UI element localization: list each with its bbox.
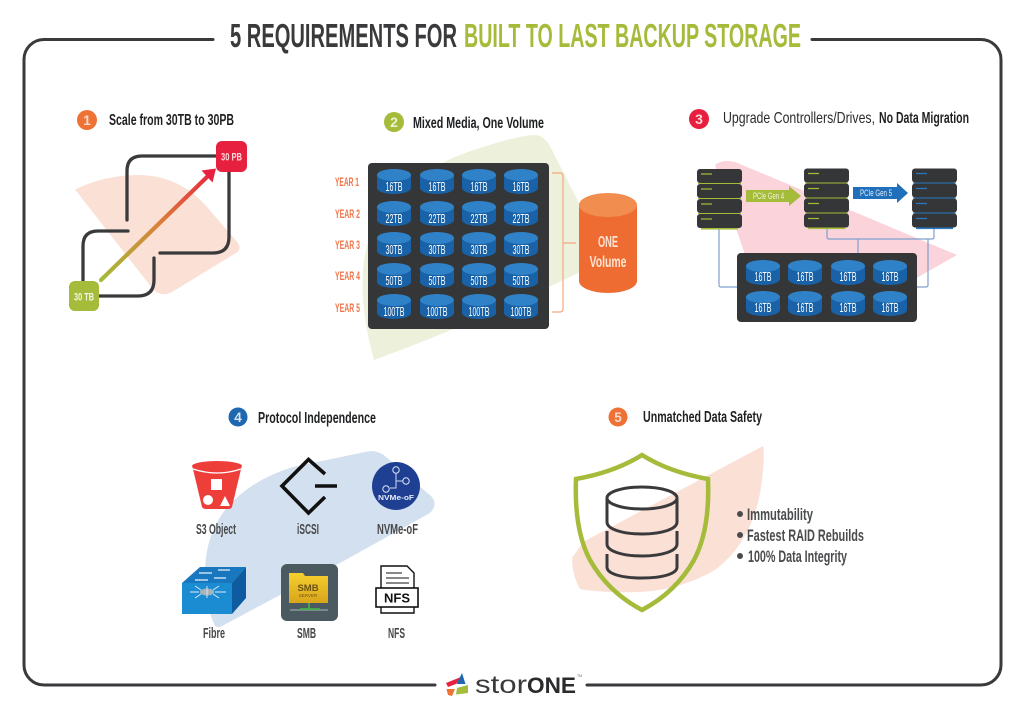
label: SMB: SMB — [297, 626, 316, 642]
box: 30 TB — [69, 281, 99, 311]
drive grid: 16TB — [470, 180, 488, 194]
icon: SMB server: SERVER — [299, 593, 318, 598]
icon: NFS file — [376, 566, 418, 613]
background shape: peach fan — [75, 175, 240, 294]
heading: upgrade: Upgrade Controllers/Drives, — [723, 110, 875, 127]
drive grid: 16TB — [512, 180, 530, 194]
label: S3 Object: S3 Object — [196, 522, 236, 538]
label: NVMe-oF: NVMe-oF — [377, 522, 418, 538]
drive shelf: 16TB — [840, 301, 856, 315]
icon: NVMe-oF: NVMe-oF — [378, 495, 415, 502]
heading: scale — [77, 110, 234, 130]
drive grid: 100TB — [384, 305, 404, 319]
box: 30 PB — [216, 141, 247, 172]
bullet list — [737, 506, 864, 566]
heading: mixed media: 2 — [390, 114, 398, 130]
heading: protocol — [228, 408, 376, 427]
arrow: PCIe Gen 4 — [746, 186, 801, 206]
icon: Fibre switch — [182, 567, 246, 614]
server: left — [697, 169, 742, 230]
drive grid: 16TB — [428, 180, 446, 194]
drive grid: 16TB — [386, 180, 402, 194]
drive grid — [368, 163, 549, 329]
heading: data safety: Unmatched Data Safety — [643, 409, 762, 426]
icon: shield — [576, 455, 708, 610]
background shape: green blob — [362, 135, 585, 360]
label: Fibre: Fibre — [203, 626, 225, 642]
logo: StorONE: ONE — [527, 673, 576, 698]
panel: data safety — [572, 408, 864, 610]
server: right — [912, 168, 957, 229]
label: NFS: NFS — [388, 626, 405, 642]
logo: StorONE: TM — [577, 674, 582, 678]
drive grid: 30TB — [386, 243, 402, 257]
server: middle — [804, 168, 849, 229]
drive grid: 22TB — [428, 212, 446, 226]
heading: protocol: 4 — [234, 410, 242, 425]
heading: scale: 1 — [83, 112, 91, 128]
box: 30 TB: 30 TB — [74, 292, 94, 304]
heading: protocol: Protocol Independence — [258, 410, 376, 427]
icon: S3 bucket — [192, 461, 242, 509]
background shape: blue blob — [205, 451, 435, 627]
drive grid: 22TB — [386, 212, 402, 226]
drive grid: 100TB — [510, 305, 532, 319]
heading: mixed media: Mixed Media, One Volume — [413, 115, 544, 132]
panel: scale — [69, 110, 247, 311]
drive shelf: 16TB — [882, 301, 898, 315]
title: 5 REQUIREMENTS FOR — [230, 17, 457, 54]
icon: database — [607, 487, 677, 578]
drive grid: 100TB — [468, 305, 490, 319]
arrow: PCIe Gen 5: PCIe Gen 5 — [860, 188, 892, 199]
connectors — [719, 228, 934, 287]
heading: mixed media — [384, 112, 544, 132]
drive shelf: 16TB — [754, 270, 772, 284]
panel: protocol independence — [182, 408, 435, 642]
logo: StorONE — [446, 671, 582, 699]
drive grid: 100TB — [426, 305, 448, 319]
one volume cylinder: Volume — [590, 254, 627, 271]
one volume cylinder: ONE — [598, 234, 618, 251]
heading: upgrade — [689, 109, 969, 129]
arrow: PCIe Gen 4: PCIe Gen 4 — [753, 191, 784, 202]
year labels — [335, 177, 360, 315]
drive shelf: 16TB — [754, 301, 772, 315]
drive grid: 50TB — [512, 274, 530, 288]
year labels: YEAR 4 — [335, 271, 360, 283]
year labels: YEAR 3 — [335, 240, 360, 252]
drive grid: 50TB — [470, 274, 488, 288]
drive shelf: 16TB — [882, 270, 898, 284]
panel: upgrade controllers — [689, 109, 969, 322]
drive grid: 30TB — [470, 243, 488, 257]
drive shelf: 16TB — [796, 301, 814, 315]
drive shelf: 16TB — [840, 270, 856, 284]
background shape: pink triangle — [715, 161, 957, 310]
bullet list: 100% Data Integrity — [748, 548, 848, 566]
heading: data safety: 5 — [614, 410, 622, 425]
bullet list: Immutability — [747, 506, 814, 524]
drive grid: 30TB — [512, 243, 530, 257]
arrow: PCIe Gen 5 — [853, 183, 908, 203]
title — [230, 17, 801, 54]
heading: data safety — [608, 408, 762, 426]
box: 30 PB: 30 PB — [221, 152, 242, 164]
drive grid: 30TB — [428, 243, 446, 257]
drive shelf — [737, 253, 917, 322]
one volume cylinder — [579, 193, 637, 293]
drive grid: 50TB — [386, 274, 402, 288]
drive grid: 22TB — [470, 212, 488, 226]
icon: NFS file: NFS — [384, 590, 410, 606]
icon: NVMe-oF — [372, 462, 420, 510]
icon: SMB server: SMB — [297, 583, 319, 594]
background shape: peach blob — [572, 446, 764, 592]
title: BUILT TO LAST BACKUP STORAGE — [464, 17, 801, 54]
icon: SMB server — [281, 564, 338, 621]
panel: mixed media — [335, 112, 637, 360]
logo: StorONE: stor — [475, 671, 527, 699]
year labels: YEAR 5 — [335, 303, 360, 315]
icon: iSCSI — [282, 460, 337, 513]
heading: upgrade: 3 — [695, 111, 703, 127]
label: iSCSI: iSCSI — [297, 522, 319, 538]
drive grid: 50TB — [428, 274, 446, 288]
connector lines — [83, 156, 229, 296]
drive shelf: 16TB — [796, 270, 814, 284]
year labels: YEAR 2 — [335, 209, 360, 221]
heading: upgrade: No Data Migration — [879, 110, 969, 127]
bullet list: Fastest RAID Rebuilds — [747, 527, 864, 545]
bracket — [552, 173, 576, 312]
heading: scale: Scale from 30TB to 30PB — [109, 112, 234, 129]
arrow: growth — [101, 168, 216, 280]
drive grid: 22TB — [512, 212, 530, 226]
year labels: YEAR 1 — [335, 177, 359, 189]
